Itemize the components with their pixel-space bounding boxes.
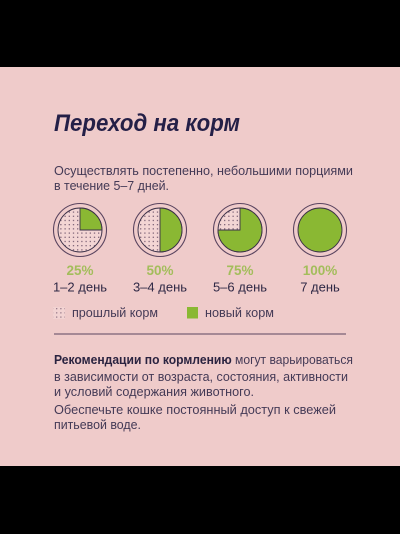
chart: 25 percent, day 1-2 xyxy=(53,204,107,294)
title: Переход на корм xyxy=(54,110,240,137)
chart: 50 percent, day 3-4: 3–4 день xyxy=(133,280,187,294)
chart: 75 percent, day 5-6 xyxy=(213,204,267,294)
panel: pink background xyxy=(0,67,400,466)
chart: 100 percent, day 7: 7 день xyxy=(300,280,340,294)
chart: 25 percent, day 1-2: 25% xyxy=(66,263,94,278)
text block: feeding recommendations xyxy=(54,352,353,432)
chart: 100 percent, day 7: 100% xyxy=(303,263,337,278)
legend: previous food: прошлый корм xyxy=(72,305,158,320)
chart: 25 percent, day 1-2: 1–2 день xyxy=(53,280,107,294)
text block: intro xyxy=(54,163,353,193)
text block: intro: Осуществлять постепенно, небольшими порциями xyxy=(54,163,353,178)
chart: 100 percent, day 7 xyxy=(294,204,346,294)
chart: 75 percent, day 5-6: 5–6 день xyxy=(213,280,267,294)
divider xyxy=(54,334,346,335)
text block: feeding recommendations: и условий содержания животного. xyxy=(54,384,254,399)
text block: feeding recommendations: Рекомендации по кормлению могут варьироваться xyxy=(54,352,353,367)
chart: 50 percent, day 3-4 xyxy=(133,204,187,294)
text block: intro: в течение 5–7 дней. xyxy=(54,178,169,193)
text block: feeding recommendations: в зависимости от возраста, состояния, активности xyxy=(54,369,348,384)
text block: feeding recommendations: питьевой воде. xyxy=(54,417,141,432)
chart: 50 percent, day 3-4: 50% xyxy=(146,263,174,278)
text block: feeding recommendations: Обеспечьте кошке постоянный доступ к свежей xyxy=(54,402,336,417)
legend: new food: новый корм xyxy=(205,305,274,320)
chart: 75 percent, day 5-6: 75% xyxy=(226,263,254,278)
